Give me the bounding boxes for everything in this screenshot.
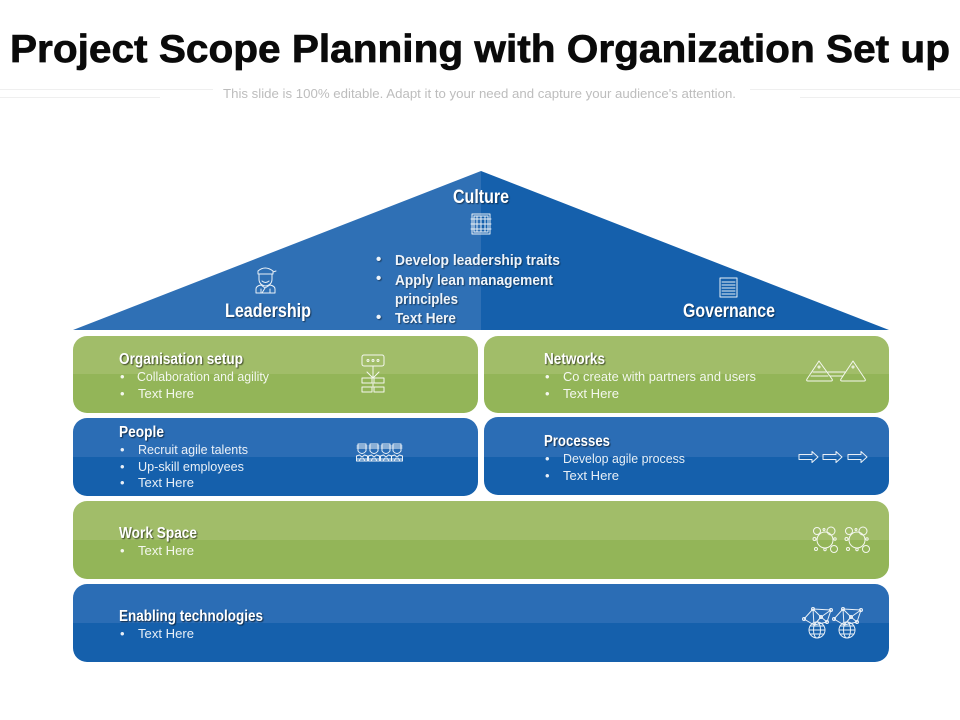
text: People bullets: •: [120, 459, 125, 474]
text: Networks bullets: Co create with partners and users: [563, 369, 756, 384]
text: culture bullets: [376, 251, 560, 327]
icon: networks: [807, 361, 865, 381]
icon: work space bubbles: [813, 527, 870, 552]
text: culture bullets: Develop leadership traits: [395, 252, 560, 269]
panel: roof: [73, 171, 889, 330]
title: Project Scope Planning with Organization Set up: [10, 28, 950, 71]
text: Processes bullets: •: [545, 468, 550, 483]
icon: people group: [356, 444, 402, 461]
heading: Work Space: Work Space: [119, 525, 197, 542]
heading: People: People: [119, 424, 164, 441]
panel: Work Space: [73, 501, 889, 579]
icon: process arrows: [799, 452, 867, 462]
text: Networks bullets: •: [545, 369, 550, 384]
icon: governance document: [720, 278, 737, 297]
text: Organisation bullets: •: [120, 369, 125, 384]
text: Organisation bullets: [120, 369, 269, 401]
text: Processes bullets: [545, 451, 685, 483]
text: People bullets: [120, 442, 248, 490]
heading: Organisation setup: Organisation setup: [119, 351, 243, 368]
text: Networks bullets: [545, 369, 756, 401]
panel: Processes: [484, 417, 889, 495]
text: People bullets: •: [120, 475, 125, 490]
text: Processes bullets: Develop agile process: [563, 451, 685, 466]
text: Work Space bullet: •: [120, 543, 125, 558]
text: Networks bullets: Text Here: [563, 386, 619, 401]
text: Networks bullets: •: [545, 386, 550, 401]
text: culture bullets: principles: [395, 291, 458, 308]
text: People bullets: Up-skill employees: [138, 459, 244, 474]
text: Processes bullets: Text Here: [563, 468, 619, 483]
text: Work Space bullet: Text Here: [138, 543, 194, 558]
text: Organisation bullets: •: [120, 386, 125, 401]
text: culture bullets: Apply lean management: [395, 272, 553, 289]
panel: Organisation setup: [73, 336, 478, 413]
text: culture bullets: Text Here: [395, 310, 456, 327]
icon: culture: [471, 214, 491, 234]
panel: People: [73, 418, 478, 496]
text: culture bullets: •: [376, 309, 381, 326]
heading: Leadership: Leadership: [225, 301, 311, 322]
text: Enabling bullet: •: [120, 626, 125, 641]
heading: Networks: Networks: [544, 351, 605, 368]
text: People bullets: Text Here: [138, 475, 194, 490]
subtitle: This slide is 100% editable. Adapt it to your need and capture your audience's attention.: [223, 87, 736, 101]
text: Organisation bullets: Text Here: [138, 386, 194, 401]
text: culture bullets: •: [376, 270, 381, 287]
heading: Processes: Processes: [544, 433, 610, 450]
text: Organisation bullets: Collaboration and agility: [137, 369, 269, 384]
text: People bullets: •: [120, 442, 125, 457]
icon: leadership person: [256, 268, 276, 293]
panel: Networks: [484, 336, 889, 413]
text: Enabling bullet: Text Here: [138, 626, 194, 641]
panel: Enabling technologies: [73, 584, 889, 662]
heading: Governance: Governance: [683, 301, 775, 322]
text: culture bullets: •: [376, 251, 381, 268]
icon: technology networks: [802, 608, 862, 638]
text: People bullets: Recruit agile talents: [138, 442, 248, 457]
icon: organisation chart: [362, 355, 384, 392]
heading: Culture: Culture: [453, 187, 509, 208]
heading: Enabling technologies: Enabling technologies: [119, 608, 263, 625]
text: Processes bullets: •: [545, 451, 550, 466]
